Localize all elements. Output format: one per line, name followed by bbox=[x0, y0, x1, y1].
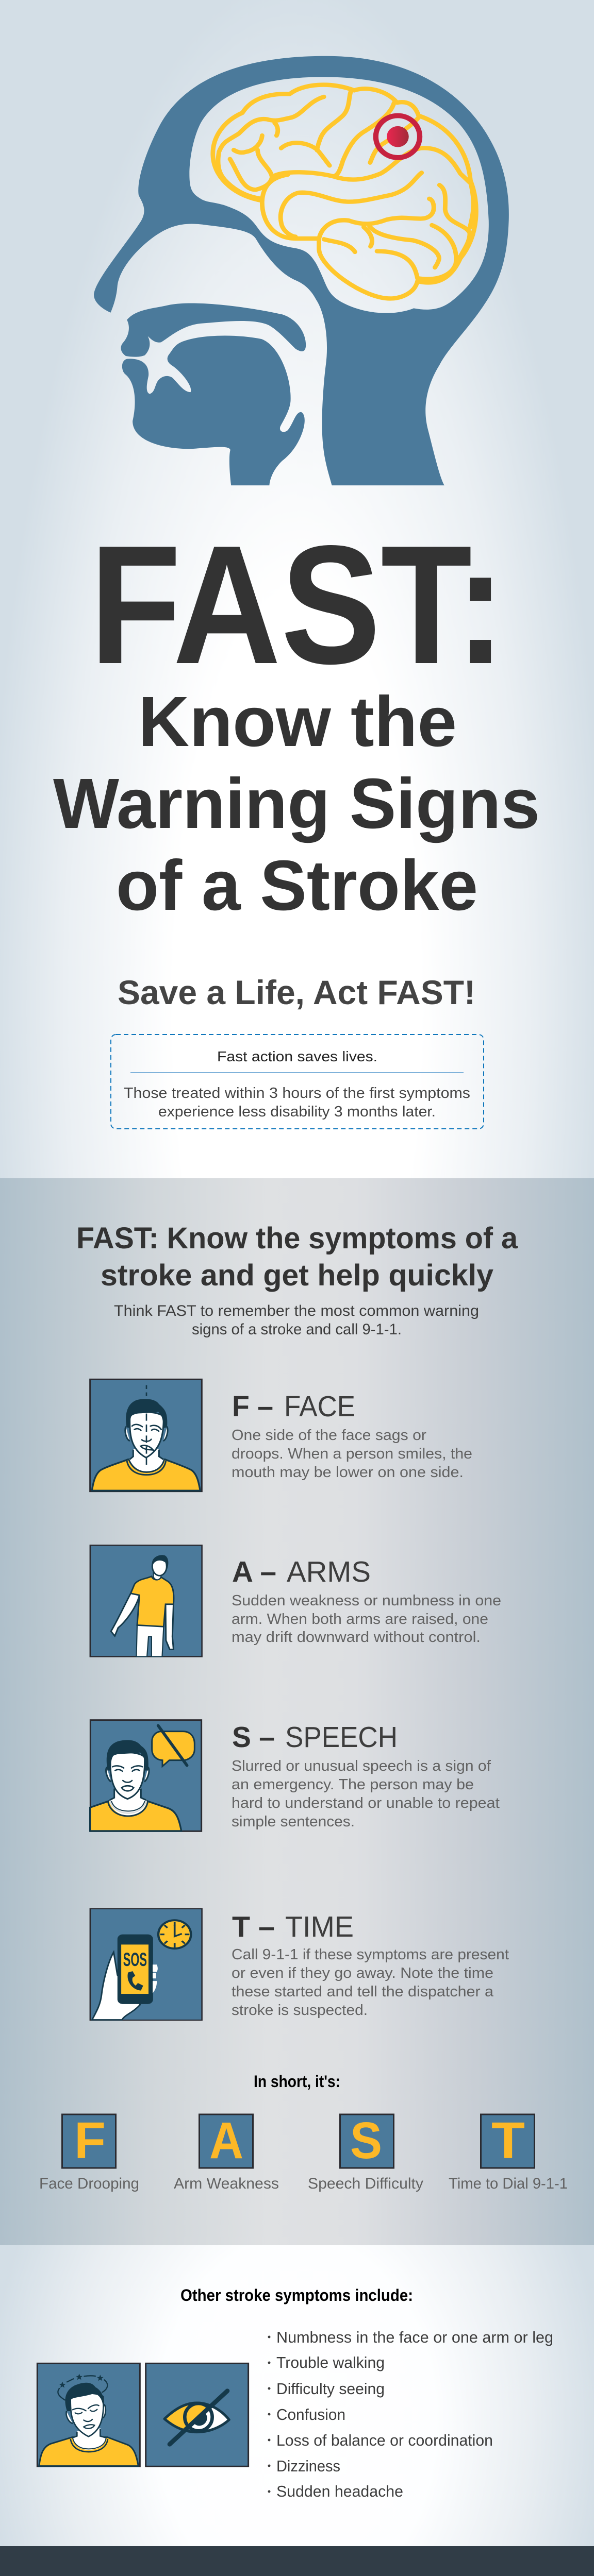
letter F bbox=[39, 2112, 139, 2192]
text: F - FACE bbox=[232, 1390, 472, 1481]
text: S - SPEECH: simple sentences. bbox=[232, 1814, 355, 1830]
title: Know the Warning Signs of a Stroke: Know the bbox=[138, 682, 457, 761]
letter A: A bbox=[209, 2112, 243, 2170]
text: T - TIME: stroke is suspected. bbox=[232, 2002, 368, 2019]
symptom list: Difficulty seeing bbox=[276, 2380, 385, 2398]
icon: face drooping bbox=[90, 1379, 202, 1492]
heading: Other stroke symptoms include: bbox=[180, 2286, 413, 2304]
FAST letter row bbox=[39, 2112, 568, 2192]
callout: fast action saves lives: experience less disability 3 months later. bbox=[158, 1104, 436, 1120]
text: T - TIME: T – bbox=[232, 1910, 275, 1943]
text: T - TIME: TIME bbox=[285, 1910, 354, 1943]
callout: fast action saves lives: Fast action saves lives. bbox=[217, 1048, 377, 1064]
icon: vision loss bbox=[146, 2363, 249, 2466]
head silhouette bbox=[94, 56, 509, 485]
letter S: S bbox=[350, 2112, 382, 2170]
letter S bbox=[308, 2112, 423, 2192]
text: S - SPEECH: Slurred or unusual speech is a sign of bbox=[232, 1758, 491, 1774]
icon: time and phone bbox=[90, 1909, 202, 2020]
icon: arm weakness bbox=[90, 1545, 202, 1656]
title: Know the Warning Signs of a Stroke: Warning Signs bbox=[53, 764, 540, 843]
title: Know the Warning Signs of a Stroke: of a Stroke bbox=[116, 846, 478, 925]
text: A - ARMS: ARMS bbox=[287, 1555, 371, 1588]
title: Know the Warning Signs of a Stroke bbox=[53, 682, 540, 925]
panel: FAST symptoms bbox=[0, 1178, 594, 2245]
intro text bbox=[114, 1302, 479, 1338]
text: S - SPEECH: an emergency. The person may be bbox=[232, 1776, 474, 1793]
symptom list: Loss of balance or coordination bbox=[276, 2431, 493, 2449]
text: F - FACE: One side of the face sags or bbox=[232, 1427, 426, 1444]
text: A - ARMS: arm. When both arms are raised, one bbox=[232, 1611, 488, 1628]
intro text: Think FAST to remember the most common warning bbox=[114, 1302, 479, 1319]
text: S - SPEECH bbox=[232, 1721, 500, 1830]
text: F - FACE: droops. When a person smiles, the bbox=[232, 1446, 472, 1462]
heading: in short: In short, it's: bbox=[254, 2072, 340, 2091]
brain outline and folds bbox=[213, 85, 476, 298]
jaw and tongue bbox=[122, 335, 305, 485]
callout: fast action saves lives bbox=[111, 1035, 484, 1129]
symptom list: Numbness in the face or one arm or leg bbox=[276, 2328, 553, 2346]
subtitle: Save a Life, Act FAST! bbox=[118, 973, 475, 1011]
letter S: Speech Difficulty bbox=[308, 2175, 423, 2192]
symptom list: Sudden headache bbox=[276, 2482, 403, 2500]
letter A: Arm Weakness bbox=[174, 2175, 279, 2192]
text: A - ARMS: may drift downward without control. bbox=[232, 1629, 481, 1646]
text: T - TIME: these started and tell the dispatcher a bbox=[232, 1984, 494, 2000]
letter T bbox=[449, 2112, 568, 2192]
text: S - SPEECH: SPEECH bbox=[285, 1721, 398, 1754]
text: A - ARMS: Sudden weakness or numbness in one bbox=[232, 1592, 501, 1609]
stroke target marker bbox=[376, 115, 420, 158]
text: S - SPEECH: S – bbox=[232, 1721, 275, 1754]
icon: speech difficulty bbox=[90, 1720, 202, 1831]
intro text: signs of a stroke and call 9-1-1. bbox=[192, 1321, 402, 1338]
title: FAST: FAST: bbox=[90, 510, 505, 699]
text: F - FACE: FACE bbox=[284, 1390, 355, 1423]
heading bbox=[76, 1222, 518, 1292]
callout: fast action saves lives: Those treated within 3 hours of the first symptoms bbox=[124, 1085, 470, 1101]
letter T: Time to Dial 9-1-1 bbox=[449, 2175, 568, 2192]
symptom list bbox=[268, 2328, 553, 2500]
text: A - ARMS: A – bbox=[232, 1555, 276, 1588]
symptom list: Confusion bbox=[276, 2405, 345, 2424]
letter F: F bbox=[74, 2112, 106, 2170]
panel: hero with title bbox=[0, 0, 594, 1178]
symptom list: Trouble walking bbox=[276, 2353, 385, 2371]
text: T - TIME: or even if they go away. Note the time bbox=[232, 1965, 493, 1981]
icon: time and phone: SOS bbox=[123, 1949, 147, 1970]
text: T - TIME bbox=[232, 1910, 509, 2019]
icon: dizziness bbox=[37, 2363, 140, 2466]
symptom list: Dizziness bbox=[276, 2457, 340, 2475]
letter F: Face Drooping bbox=[39, 2175, 139, 2192]
text: F - FACE: F – bbox=[232, 1390, 273, 1423]
letter T: T bbox=[491, 2112, 525, 2170]
text: F - FACE: mouth may be lower on one side. bbox=[232, 1464, 464, 1481]
text: A - ARMS bbox=[232, 1555, 501, 1646]
text: S - SPEECH: hard to understand or unable to repeat bbox=[232, 1795, 500, 1811]
heading: FAST: Know the symptoms of a bbox=[76, 1222, 518, 1255]
panel: other symptoms bbox=[0, 2245, 594, 2546]
illustration: head profile with brain bbox=[94, 56, 509, 485]
letter A bbox=[174, 2112, 279, 2192]
text: T - TIME: Call 9-1-1 if these symptoms are present bbox=[232, 1946, 509, 1963]
heading: stroke and get help quickly bbox=[101, 1259, 493, 1292]
palate bbox=[121, 303, 306, 357]
panel: quick facts and stats bbox=[0, 2546, 594, 2576]
